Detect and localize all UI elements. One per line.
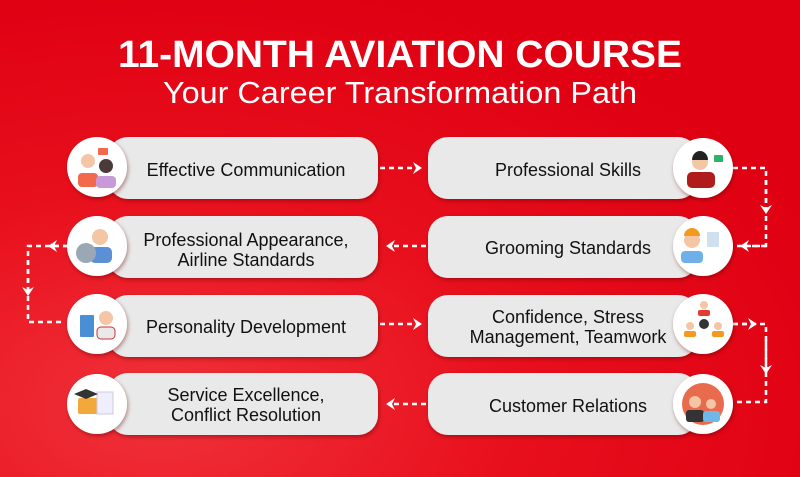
panel: Customer Relations [428, 373, 733, 435]
panel: Personality Development: Personality Development [146, 317, 346, 337]
panel: Professional Appearance [67, 216, 378, 278]
panel: Effective Communication: Effective Communication [147, 160, 345, 180]
panel: Professional Skills: Professional Skills [495, 160, 641, 180]
panel: Confidence [428, 294, 733, 357]
panel: Professional Appearance: Airline Standards [177, 250, 315, 270]
panel: Grooming Standards [428, 216, 733, 278]
panel: Effective Communication [67, 137, 378, 199]
panel: Professional Appearance: Professional Appearance, [143, 230, 349, 250]
panel: Customer Relations: Customer Relations [489, 396, 647, 416]
panel: Service Excellence: Service Excellence, [167, 385, 325, 405]
panel: Grooming Standards: Grooming Standards [485, 238, 651, 258]
panel: Confidence: Management, Teamwork [470, 327, 667, 347]
title: 11-MONTH AVIATION COURSE [118, 34, 682, 76]
panel: Confidence: Confidence, Stress [492, 307, 644, 327]
arrows: connecting path [28, 168, 766, 404]
panel: Professional Skills [428, 137, 733, 199]
panel: Service Excellence: Conflict Resolution [171, 405, 321, 425]
panel: Personality Development [67, 294, 378, 357]
subtitle: Your Career Transformation Path [163, 75, 637, 110]
panel: Service Excellence [67, 373, 378, 435]
